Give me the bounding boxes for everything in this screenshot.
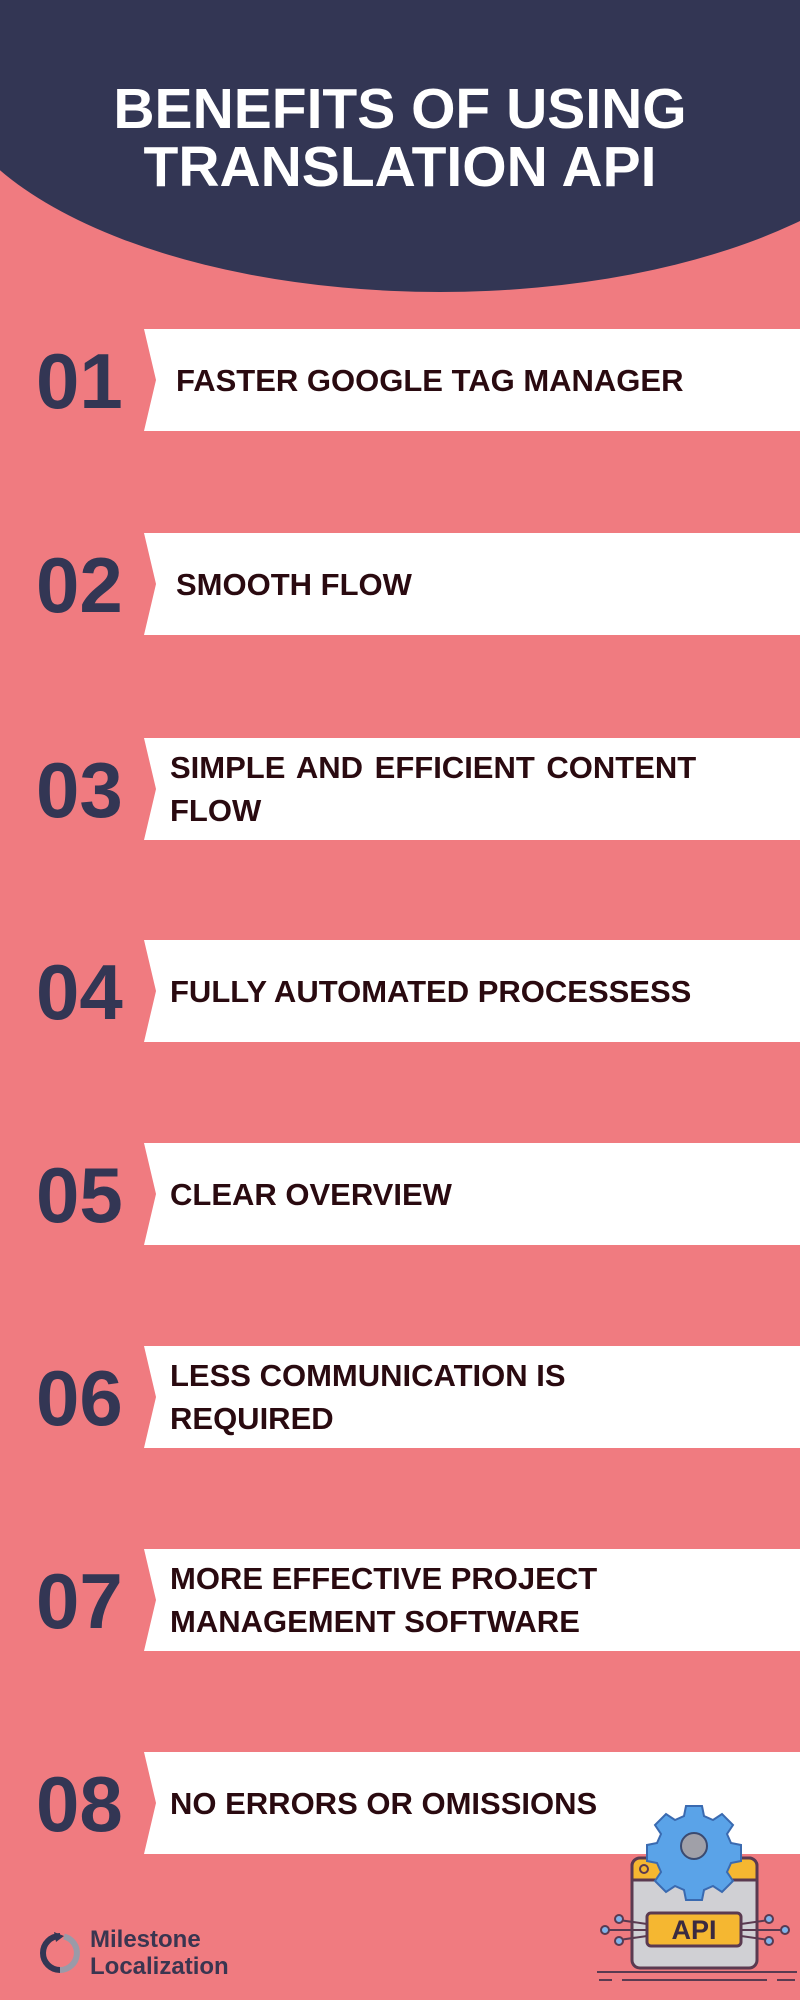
title: BENEFITS OF USING <box>113 77 687 141</box>
row 06: LESS COMMUNICATION IS <box>170 1358 566 1393</box>
header ellipse <box>0 0 800 292</box>
row 08: 08 <box>36 1760 123 1848</box>
row 02: 02 <box>36 541 123 629</box>
logo: Localization <box>90 1953 229 1980</box>
row 06: 06 <box>36 1354 123 1442</box>
row 03: FLOW <box>170 793 261 828</box>
row 02 <box>36 533 800 635</box>
icon: API gear <box>597 1805 797 1981</box>
row 04: FULLY AUTOMATED PROCESSESS <box>170 974 691 1008</box>
row 01: 01 <box>36 337 123 425</box>
logo <box>40 1926 229 1980</box>
row 07 <box>36 1549 800 1651</box>
row 03 <box>36 738 800 840</box>
row 07: MANAGEMENT SOFTWARE <box>170 1604 580 1639</box>
logo: Milestone <box>90 1926 201 1953</box>
row 01 <box>36 329 800 431</box>
title: TRANSLATION API <box>144 135 656 199</box>
row 04 <box>36 940 800 1042</box>
title <box>113 77 687 199</box>
row 05: CLEAR OVERVIEW <box>170 1176 452 1212</box>
icon: API gear: API <box>671 1915 717 1945</box>
row 08: NO ERRORS OR OMISSIONS <box>170 1786 597 1820</box>
row 06 <box>36 1346 800 1448</box>
row 08 <box>36 1752 800 1854</box>
row 06: REQUIRED <box>170 1401 334 1436</box>
row 07: MORE EFFECTIVE PROJECT <box>170 1561 597 1596</box>
row 03: 03 <box>36 746 123 834</box>
row 05: 05 <box>36 1151 123 1239</box>
row 05 <box>36 1143 800 1245</box>
row 02: SMOOTH FLOW <box>176 566 412 602</box>
row 03: SIMPLE AND EFFICIENT CONTENT <box>170 750 696 785</box>
row 07: 07 <box>36 1557 123 1645</box>
row 04: 04 <box>36 948 123 1036</box>
row 01: FASTER GOOGLE TAG MANAGER <box>176 362 684 398</box>
